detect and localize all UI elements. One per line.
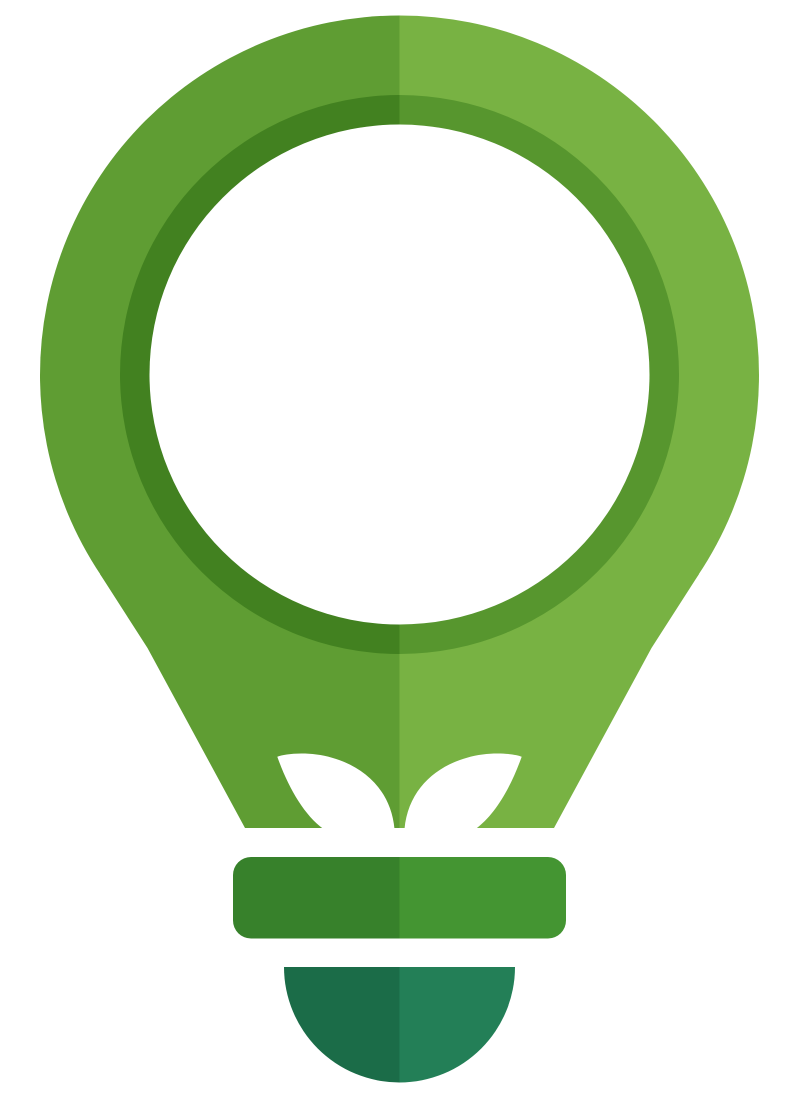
central white circle (150, 124, 650, 624)
right white leaf (404, 753, 522, 829)
bulb base semicircle (284, 967, 515, 1082)
bulb glass body (40, 16, 759, 828)
bulb collar band (233, 857, 566, 938)
left white leaf (277, 753, 394, 829)
dark ring around central circle (120, 95, 679, 654)
